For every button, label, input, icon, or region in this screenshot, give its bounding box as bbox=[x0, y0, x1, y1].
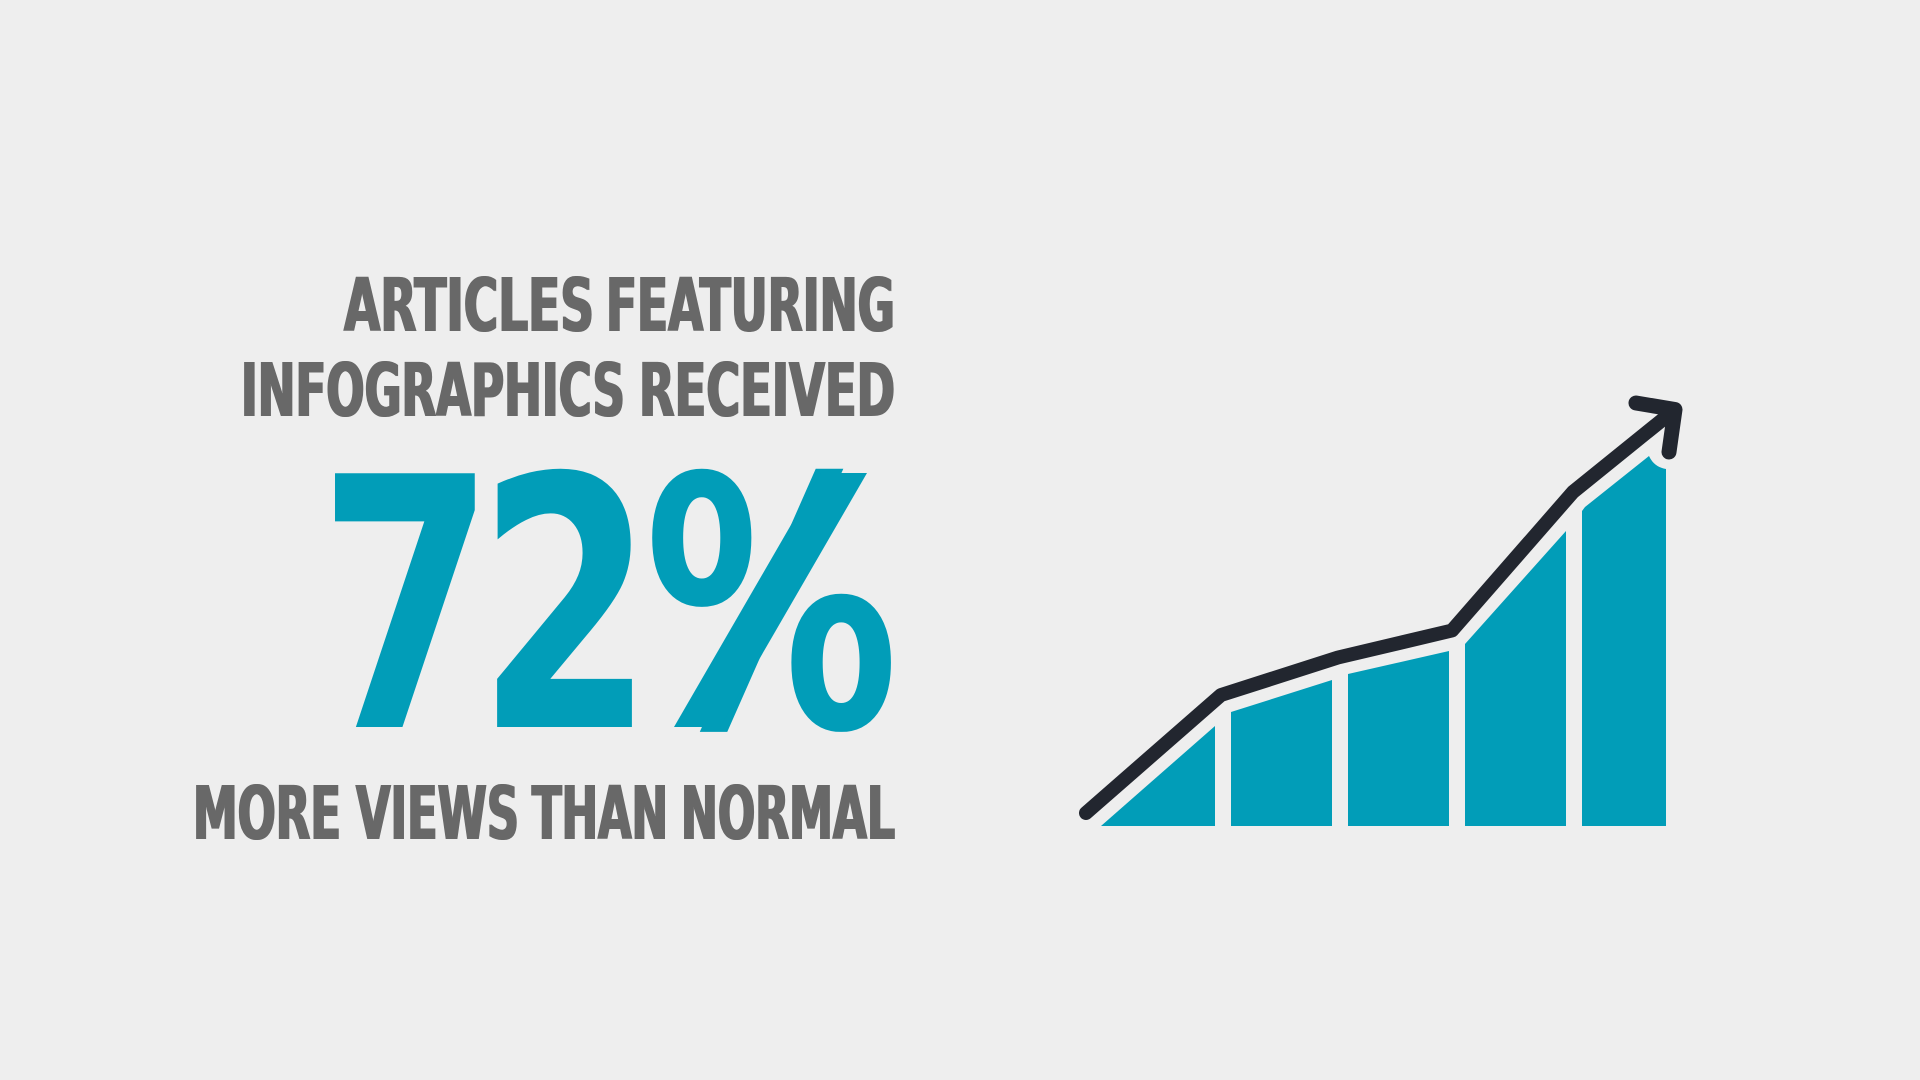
heading line 1: FEATURING bbox=[606, 263, 895, 349]
percent slash bbox=[674, 473, 867, 727]
bar 2 bbox=[1231, 680, 1332, 826]
subheading: more views than normal: THAN bbox=[532, 771, 668, 857]
big number: 72%: 2 bbox=[477, 405, 654, 810]
bar 4 bbox=[1465, 531, 1566, 826]
bar 5 bbox=[1582, 456, 1666, 826]
big number: 72%: % bbox=[644, 405, 899, 810]
arrow head bbox=[1636, 403, 1675, 452]
bar 1 bbox=[1101, 726, 1215, 826]
arrow line bbox=[1086, 412, 1672, 813]
big number: 72% bbox=[318, 405, 899, 810]
bar 3 bbox=[1348, 651, 1449, 826]
heading line 2: INFOGRAPHICS bbox=[241, 348, 625, 434]
heading line 1: ARTICLES bbox=[344, 263, 594, 349]
trend arrow bbox=[1086, 403, 1675, 813]
subheading: more views than normal: MORE bbox=[193, 771, 341, 857]
area bar chart bbox=[1101, 456, 1666, 826]
subheading: more views than normal: VIEWS bbox=[356, 771, 519, 857]
heading line 2: RECEIVED bbox=[639, 348, 895, 434]
subheading: more views than normal bbox=[193, 771, 895, 857]
big number: 72%: 7 bbox=[318, 405, 495, 810]
heading: articles featuring infographics received bbox=[241, 263, 895, 434]
subheading: more views than normal: NORMAL bbox=[681, 771, 895, 857]
